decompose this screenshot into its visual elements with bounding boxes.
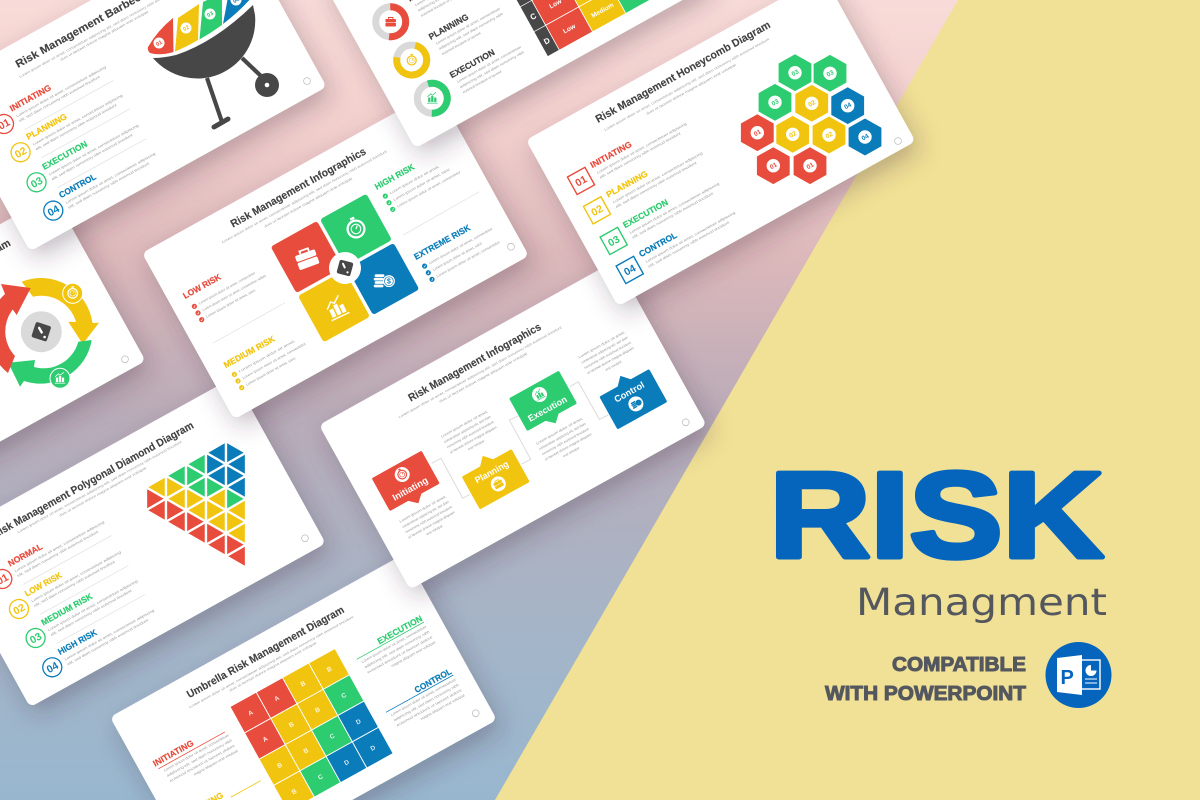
row: initiating: elit, sed diam nonummy nibh euismod tincidunt (599, 131, 681, 180)
risk matrix: D (355, 718, 363, 726)
slide subtitle (604, 37, 770, 132)
honeycomb diagram: 01 (806, 161, 816, 171)
risk matrix: B (276, 762, 284, 770)
quadrant diagram (271, 194, 419, 342)
row: initiating: elit, sed diam nonummy nibh euismod tincidunt (18, 75, 101, 123)
risk matrix: D (343, 759, 351, 767)
list: high risk: Lorem ipsum dolor sit amet, consectetur (396, 170, 462, 209)
slide subtitle (189, 615, 354, 709)
row: control: elit, sed diam nonummy nibh euismod tincidunt (648, 220, 730, 269)
slide card (0, 377, 326, 707)
callout: execution: Execution (526, 394, 569, 424)
text block: initiating: consectetuer adipiscing elit, sed diam (402, 500, 450, 529)
text block: execution: ut laoreet dolore magna aliquam (544, 432, 592, 461)
honeycomb diagram: 04 (843, 101, 853, 111)
slide subtitle: duis ut laoreet dolore magna aliquam erat volutpat (60, 10, 149, 62)
slide card (323, 0, 712, 148)
text block: execution: erat volutpat (562, 446, 580, 458)
row: control: CONTROL (57, 171, 98, 200)
risk matrix: B (302, 747, 310, 756)
row: execution: 03 (29, 175, 45, 191)
row: execution: EXECUTION (40, 139, 89, 172)
slide subtitle: duis ut laoreet dolore magna aliquam erat volutpat (59, 466, 147, 518)
row text: execution: euismod tincidunt ut laoreet (462, 70, 503, 94)
label: control: CONTROL (413, 666, 453, 695)
icon: PowerPoint logo (1046, 642, 1112, 708)
barbecue grill illustration: 03 (206, 11, 215, 19)
risk table: D (542, 36, 552, 46)
label: execution: Lorem ipsum dolor sit amet, consectetuer (361, 624, 428, 664)
row: high risk: elit, sed diam nonummy nibh euismod tincidunt (67, 618, 149, 666)
row: high risk (37, 598, 159, 680)
label: initiating: euismod tincidunt ut laoreet dolore (169, 744, 236, 783)
row: initiating (566, 111, 691, 195)
row: normal: Lorem ipsum dolor sit amet, consectetuer adipiscing (14, 520, 105, 573)
text block: control (578, 330, 638, 380)
text block: execution: nonummy nibh euismod tincidunt (541, 427, 589, 456)
risk matrix: C (340, 692, 348, 700)
row text: planning: adipiscing elit, sed diam nonummy nibh (438, 12, 504, 51)
label: initiating: INITIATING (151, 738, 196, 768)
row: control: 04 (46, 203, 62, 219)
text block: initiating (399, 495, 459, 545)
page number icon (472, 710, 479, 717)
row: planning: Lorem ipsum dolor sit amet, consectetuer adipiscing (612, 151, 703, 204)
row: medium risk: elit, sed diam nonummy nibh euismod tincidunt (50, 589, 132, 637)
row: control (38, 141, 160, 223)
compatibility text (825, 654, 1026, 705)
label: initiating: Lorem ipsum dolor sit amet, consectetuer (163, 733, 231, 773)
row: high risk: Lorem ipsum dolor sit amet, consectetuer adipiscing (64, 609, 155, 661)
slide title: Umbrella Risk Management Diagram (185, 604, 346, 701)
row: planning (5, 83, 130, 170)
row: planning: elit, sed diam nonummy nibh euismod tincidunt (35, 103, 117, 151)
text block: initiating: nonummy nibh euismod tincidunt (404, 505, 453, 534)
text block: execution (535, 417, 595, 467)
panel: honeycomb slide (526, 0, 915, 306)
slide subtitle: Lorem ipsum dolor sit amet, consectetuer adipiscing elit, sed diam nonummy nibh euismod tincidunt (221, 150, 388, 244)
row: normal (0, 509, 112, 597)
subheading: Managment: Managment (856, 581, 1107, 624)
row: execution (21, 113, 146, 200)
row text: execution: Lorem ipsum dolor sit amet, consectetuer (456, 45, 523, 84)
callout: planning: Planning (473, 459, 510, 485)
row text: planning (427, 0, 508, 57)
slide subtitle: duis ut laoreet dolore magna aliquam erat volutpat (439, 352, 528, 404)
row: planning: elit, sed diam nonummy nibh euismod tincidunt (615, 161, 697, 209)
barbecue grill illustration: 01 (155, 40, 164, 48)
text block: planning: erat volutpat (467, 439, 485, 451)
label: control (381, 666, 466, 734)
list: low risk (181, 252, 271, 324)
row: execution: 03 (606, 233, 622, 250)
risk matrix: B (326, 665, 334, 674)
list: medium risk: Lorem ipsum dolor sit amet, consectetur (242, 341, 307, 380)
panel: four quadrant slide (142, 90, 529, 419)
panel: umbrella risk matrix slide (110, 554, 497, 800)
list: low risk: Lorem ipsum dolor sit amet, consectetur (198, 271, 257, 306)
slide card (142, 90, 529, 419)
text block: control: erat volutpat (605, 360, 622, 372)
callout: initiating: Initiating (391, 475, 430, 503)
row: execution (598, 171, 724, 255)
panel: barbecue slide (0, 0, 327, 251)
honeycomb diagram: 02 (807, 99, 817, 109)
page number icon (304, 78, 310, 84)
row: medium risk (20, 568, 145, 656)
risk matrix: A (273, 695, 281, 703)
donut: execution (414, 80, 451, 117)
connector lines (432, 382, 608, 498)
list: high risk: Lorem ipsum dolor sit amet, sanc (393, 167, 451, 202)
text block: execution: consectetuer adipiscing elit, sed diam (538, 422, 587, 451)
honeycomb diagram: 01 (753, 128, 763, 138)
label: initiating: adipiscing elit, sed diam nonummy nibh (166, 738, 233, 778)
text block: control: consectetuer adipiscing elit, sed diam (581, 335, 629, 365)
label: control: euismod tincidunt ut laoreet dolore (396, 688, 463, 727)
text block: planning: Lorem ipsum dolor sit amet, (440, 410, 489, 439)
heading: RISK: RISK (770, 447, 1104, 583)
slide card (526, 0, 915, 306)
honeycomb diagram (741, 55, 881, 184)
row: initiating: Lorem ipsum dolor sit amet, consectetuer adipiscing (16, 65, 107, 118)
slide subtitle (398, 325, 562, 419)
slide subtitle: Lorem ipsum dolor sit amet, consectetuer adipiscing elit, sed diam nonummy nibh euismod tincidunt (17, 440, 182, 534)
honeycomb diagram: 02 (825, 131, 835, 140)
label: execution: adipiscing elit, sed diam nonummy nibh (364, 630, 430, 669)
list: extreme risk: Lorem ipsum dolor sit amet, sanc (432, 241, 483, 272)
risk matrix: C (317, 773, 325, 782)
risk matrix: B (288, 721, 296, 729)
slide subtitle: Lorem ipsum dolor sit amet, consectetuer adipiscing elit, sed diam nonummy nibh euismod tincidunt (189, 615, 354, 709)
cycle arrows diagram (0, 278, 99, 388)
row: control (614, 200, 740, 284)
list: extreme risk: Lorem ipsum dolor sit amet, consectetur (428, 226, 494, 265)
list: high risk: HIGH RISK (373, 161, 417, 192)
risk table: Medium (590, 2, 615, 20)
row: initiating (0, 54, 113, 142)
row: planning: 02 (13, 145, 29, 161)
row: medium risk: Lorem ipsum dolor sit amet, consectetuer adipiscing (47, 579, 138, 632)
page number icon (895, 138, 901, 144)
row: execution: Lorem ipsum dolor sit amet, consectetuer adipiscing (48, 124, 139, 176)
list: medium risk: Lorem ipsum dolor sit amet, (238, 339, 296, 374)
row: low risk: Lorem ipsum dolor sit amet, consectetuer adipiscing (31, 550, 122, 603)
barbecue grill illustration: 02 (182, 25, 191, 33)
row: execution: Lorem ipsum dolor sit amet, consectetuer adipiscing (629, 182, 720, 235)
row: control: Lorem ipsum dolor sit amet, consectetuer adipiscing (645, 211, 736, 264)
slide subtitle: duis ut laoreet dolore magna aliquam erat volutpat (229, 641, 317, 693)
row: planning: Lorem ipsum dolor sit amet, consectetuer adipiscing (32, 94, 123, 146)
slide subtitle: Lorem ipsum dolor sit amet, consectetuer adipiscing elit, sed diam nonummy nibh euismod tincidunt (398, 325, 562, 419)
label: control: Lorem ipsum dolor sit amet, consectetuer (390, 677, 458, 717)
risk matrix: A (247, 709, 255, 718)
text block: initiating: ut laoreet dolore magna aliquam (407, 510, 456, 539)
slide title: Risk Management Infographics (229, 146, 368, 230)
risk table (507, 0, 659, 57)
text block: control: Lorem ipsum dolor sit amet, (578, 330, 626, 359)
risk table: C (529, 11, 538, 22)
callout: control (595, 362, 667, 429)
slide subtitle: Lorem ipsum dolor sit amet, consectetuer adipiscing elit, sed diam nonummy nibh euismod tincidunt (604, 37, 770, 132)
honeycomb diagram: 04 (861, 133, 871, 142)
slide title: Risk Management Infographics (406, 321, 543, 404)
honeycomb diagram: 03 (771, 98, 781, 108)
row: low risk: 02 (11, 601, 27, 618)
row text: planning: Lorem ipsum dolor sit amet, consectetuer (435, 6, 502, 46)
list: extreme risk: EXTREME RISK (412, 222, 473, 262)
label: initiating (151, 720, 239, 791)
row: execution: elit, sed diam nonummy nibh euismod tincidunt (632, 191, 714, 240)
page number icon (302, 535, 308, 542)
row: control: 04 (622, 262, 638, 279)
list: medium risk (222, 321, 311, 392)
slide subtitle: Lorem ipsum dolor sit amet, consectetuer adipiscing elit, sed diam nonummy nibh euismod tincidunt (19, 0, 185, 79)
row text: execution (448, 34, 529, 96)
row text: execution: EXECUTION (448, 47, 496, 80)
text block: initiating: Lorem ipsum dolor sit amet, (399, 495, 447, 524)
row: planning: 02 (589, 203, 605, 219)
risk matrix: C (329, 732, 336, 741)
panel: polygonal diamond slide (0, 377, 326, 707)
honeycomb diagram: 03 (791, 68, 801, 78)
panel: process flow slide (319, 261, 707, 589)
risk matrix: A (262, 735, 269, 744)
panel: circular cycle slide (0, 195, 146, 525)
row: high risk: HIGH RISK (56, 627, 99, 657)
list: medium risk: MEDIUM RISK (222, 333, 277, 370)
honeycomb diagram: 01 (769, 161, 779, 171)
slide subtitle (17, 440, 182, 534)
slide subtitle (221, 150, 388, 244)
donut: planning (393, 42, 430, 78)
label: planning (181, 771, 261, 800)
list: extreme risk (412, 213, 502, 284)
page number icon (122, 356, 128, 363)
text block: planning: consectetuer adipiscing elit, sed diam (443, 415, 492, 444)
callout: initiating (372, 451, 443, 517)
row: control: Lorem ipsum dolor sit amet, consectetuer adipiscing (65, 152, 156, 205)
risk matrix (230, 649, 393, 800)
barbecue grill illustration (148, 0, 279, 127)
callout: planning (458, 442, 530, 509)
text block: initiating: erat volutpat (426, 524, 443, 536)
label: execution (352, 613, 437, 681)
slide subtitle: duis ut laoreet dolore magna aliquam erat volutpat (264, 177, 353, 229)
slide title: Risk Management Honeycomb Diagram (594, 19, 773, 126)
risk matrix: D (369, 744, 377, 753)
risk table: Low (562, 23, 578, 35)
text block: control: nonummy nibh euismod tincidunt (583, 341, 632, 370)
row text: initiating (406, 0, 487, 19)
row: execution: elit, sed diam nonummy nibh euismod tincidunt (51, 133, 133, 181)
compatibility text: COMPATIBLE (892, 654, 1026, 676)
page number icon (682, 419, 689, 426)
text block: planning: ut laoreet dolore magna aliquam (449, 425, 497, 454)
list: medium risk: Lorem ipsum dolor sit amet, sanc (245, 356, 297, 387)
honeycomb diagram: 03 (826, 69, 836, 79)
compatibility text: WITH POWERPOINT (825, 683, 1026, 705)
list: extreme risk: Lorem ipsum dolor sit amet, consectetur (436, 240, 501, 279)
list: high risk (373, 143, 462, 214)
list: high risk: Lorem ipsum dolor sit amet, (389, 165, 440, 195)
label: initiating: magna aliquam erat volutpat (193, 749, 239, 777)
row: low risk (3, 539, 128, 627)
row: control: elit, sed diam nonummy nibh euismod tincidunt (68, 161, 150, 210)
page number icon (508, 243, 514, 250)
risk matrix: B (300, 680, 307, 689)
label: execution: euismod tincidunt ut laoreet dolore (367, 635, 433, 674)
risk matrix: B (314, 706, 322, 715)
row text: execution: adipiscing elit, sed diam nonummy nibh (459, 50, 525, 89)
risk matrix: B (291, 788, 299, 796)
slide card (110, 554, 497, 800)
row: initiating: INITIATING (8, 82, 53, 113)
row: planning (582, 140, 707, 224)
text block: execution: Lorem ipsum dolor sit amet, (535, 417, 584, 446)
divider right (403, 192, 479, 235)
text block: planning: nonummy nibh euismod tincidunt (446, 420, 494, 449)
honeycomb diagram: 02 (788, 130, 798, 140)
icon: PowerPoint logo: P (1060, 667, 1074, 689)
row text: planning: PLANNING (427, 12, 470, 42)
slide subtitle: duis ut laoreet dolore magna aliquam erat volutpat (646, 63, 737, 116)
text block: control: ut laoreet dolore magna aliquam (586, 346, 635, 375)
row: initiating: 01 (573, 173, 589, 190)
triangle diamond diagram (146, 441, 246, 568)
row: planning: PLANNING (604, 168, 650, 199)
donut: initiating (376, 7, 406, 37)
quadrant diagram: $ (387, 279, 391, 286)
row: initiating: INITIATING (588, 139, 634, 170)
list: low risk: LOW RISK (181, 271, 223, 301)
row: high risk: 04 (45, 660, 61, 676)
label: control: magna aliquam erat volutpat (420, 693, 465, 721)
row: execution: EXECUTION (621, 197, 670, 230)
row text: planning: euismod tincidunt ut laoreet (441, 31, 482, 56)
row: planning: PLANNING (24, 111, 69, 142)
row: medium risk: 03 (28, 630, 44, 647)
text block: planning (440, 410, 500, 460)
slide card (319, 261, 707, 589)
slide card (0, 0, 327, 251)
yellow diagonal panel (495, 0, 1200, 800)
list: low risk: Lorem ipsum dolor sit amet, sanc (205, 288, 257, 319)
callout: execution (509, 371, 580, 437)
row: medium risk: MEDIUM RISK (39, 591, 95, 627)
label: control: adipiscing elit, sed diam nonummy nibh (393, 683, 460, 722)
row: normal: NORMAL (6, 541, 44, 568)
label: execution: EXECUTION (375, 613, 424, 646)
slide card (0, 195, 146, 525)
list: low risk: Lorem ipsum dolor sit amet, consectetur adipis (202, 274, 267, 312)
row: initiating: Lorem ipsum dolor sit amet, consectetuer adipiscing (596, 122, 687, 175)
row: control: CONTROL (637, 230, 679, 259)
divider left (213, 303, 285, 343)
row: normal: elit, sed diam nonummy nibh euismod tincidunt (17, 530, 99, 578)
panel: donut and risk table slide (323, 0, 712, 148)
label: execution: magna aliquam erat volutpat (390, 640, 436, 668)
row: low risk: LOW RISK (23, 569, 64, 598)
row: low risk: elit, sed diam nonummy nibh euismod tincidunt (33, 560, 116, 608)
callout: control: Control (612, 380, 646, 404)
